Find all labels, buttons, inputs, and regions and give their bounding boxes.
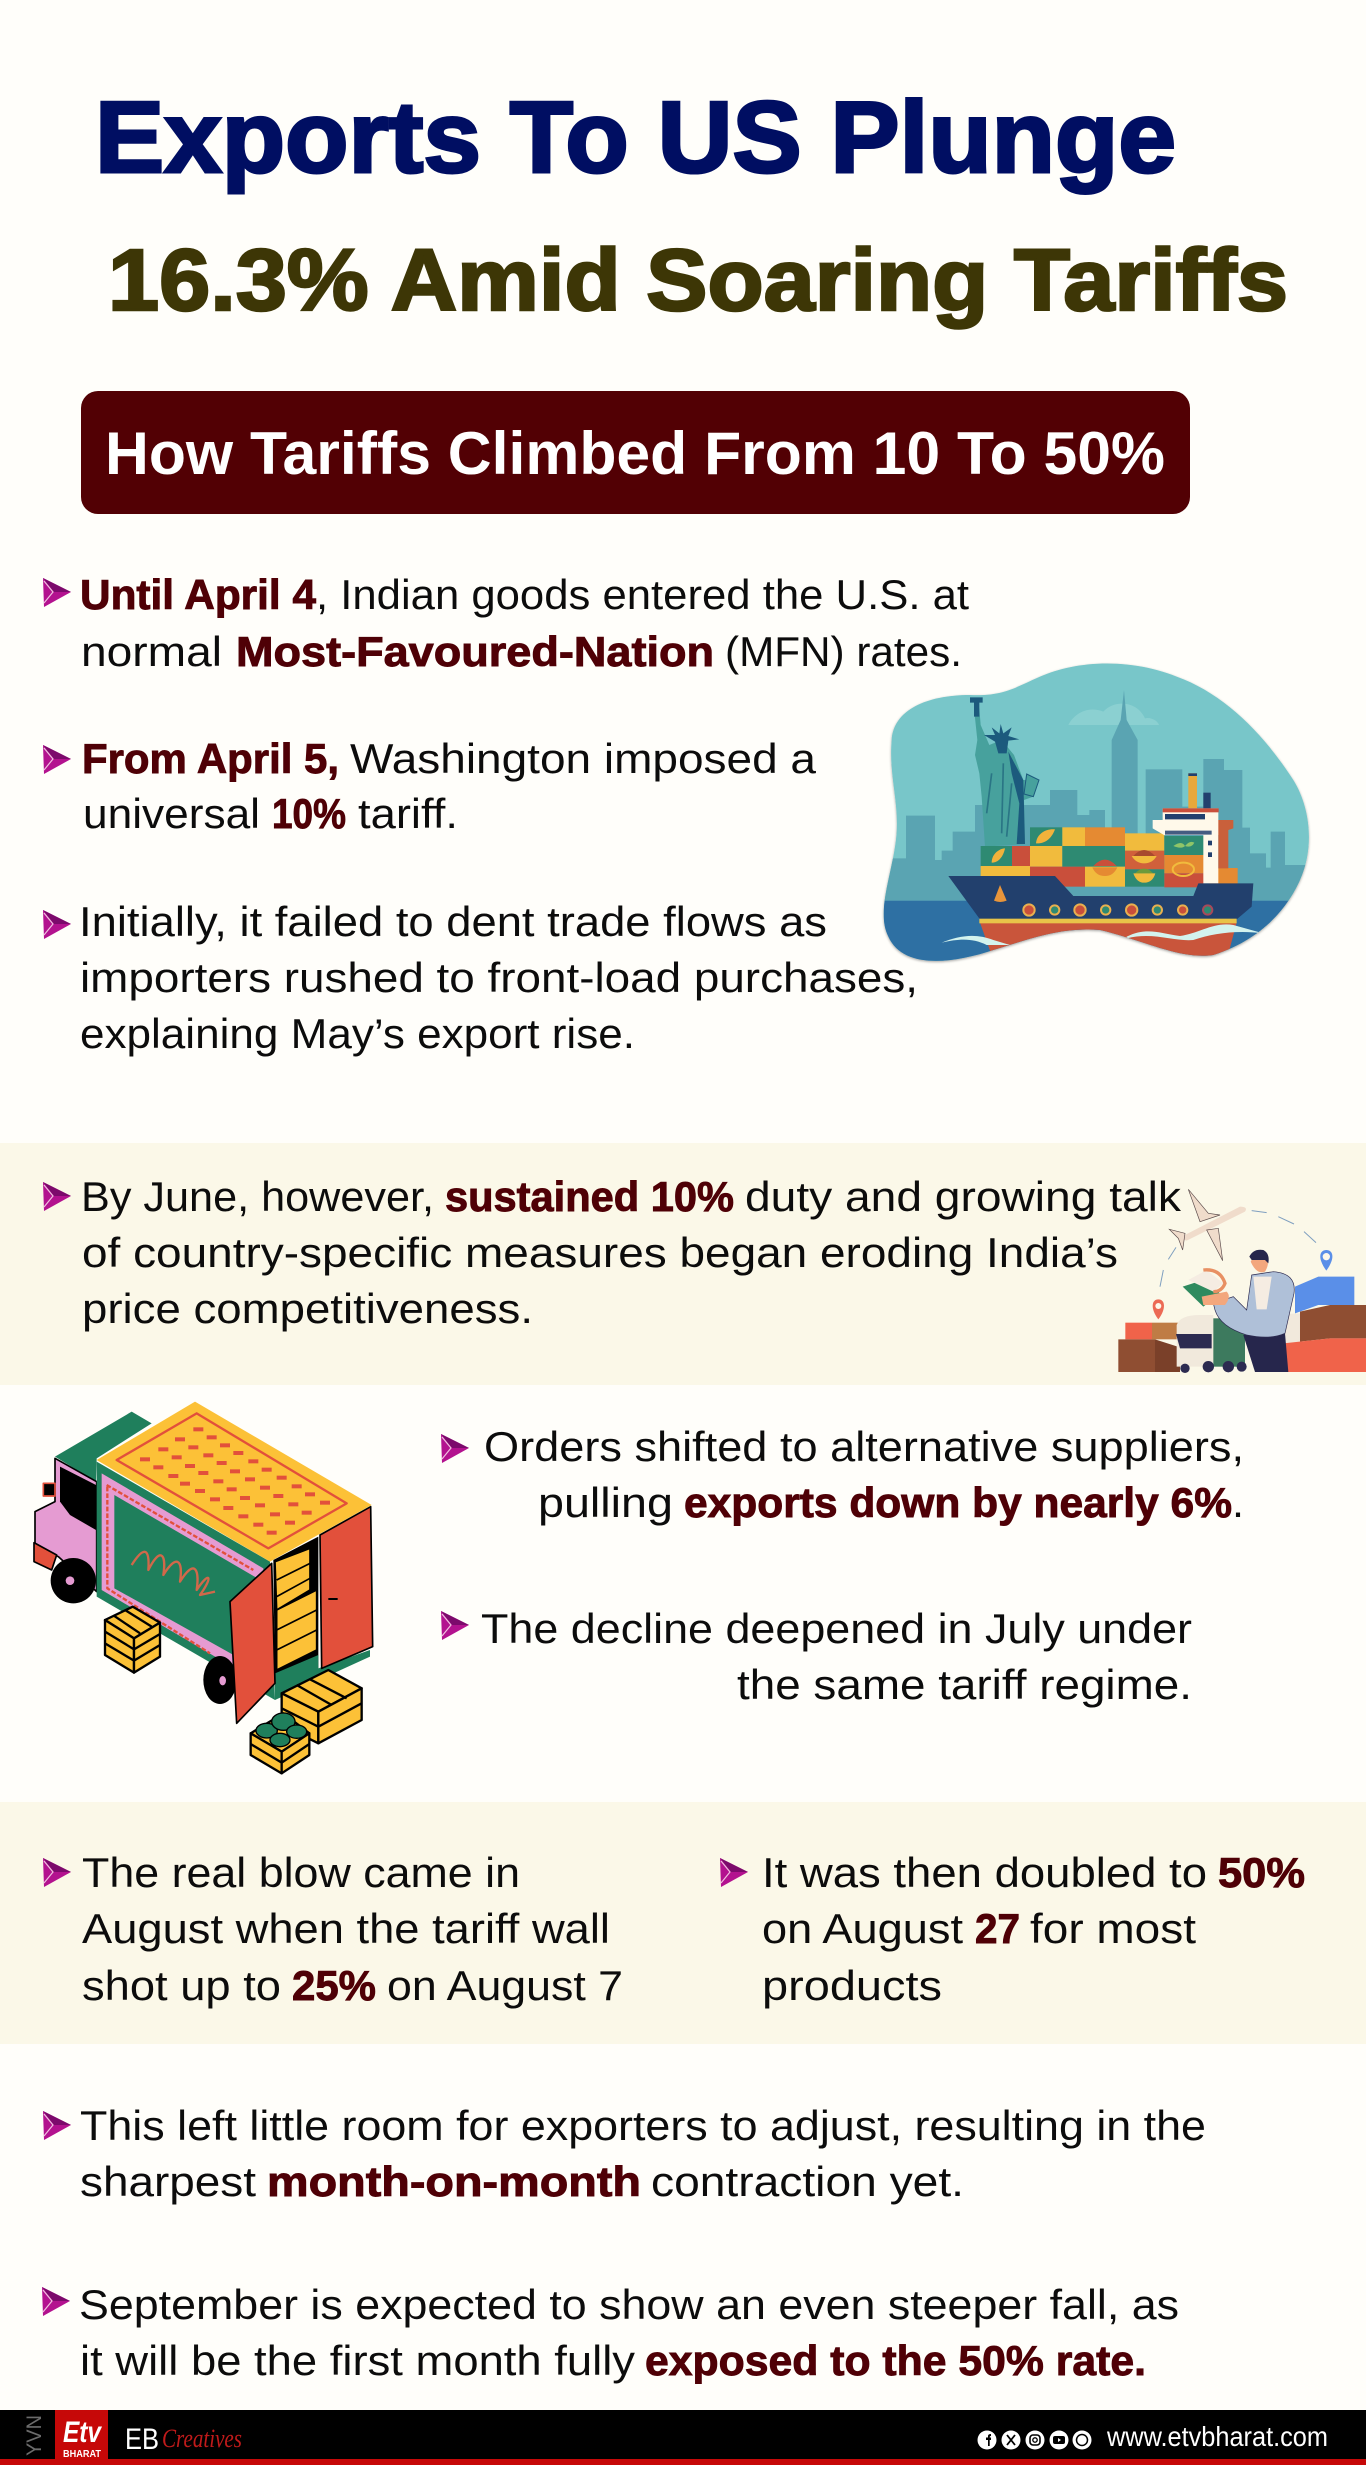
text block: little room	[43, 2102, 1206, 2205]
text block: real blow: The real blow came in	[82, 1849, 520, 1896]
title	[95, 82, 1288, 329]
text block: until april 4: (MFN) rates.	[725, 628, 962, 675]
text block: little room: month-on-month	[267, 2158, 641, 2205]
text block: by june: price competitiveness.	[82, 1285, 533, 1332]
text block: doubled to 50: for most	[1030, 1905, 1196, 1952]
text block: orders shifted	[441, 1423, 1244, 1526]
text block: initially: Initially, it failed to dent trade flows as	[79, 898, 827, 945]
text block: september: exposed to the 50% rate.	[645, 2337, 1146, 2384]
text block: doubled to 50: 27	[975, 1905, 1020, 1952]
text block: from april 5: universal	[83, 790, 260, 837]
text block: by june: duty and growing talk	[745, 1173, 1182, 1220]
text block: little room: contraction yet.	[651, 2158, 964, 2205]
text block: decline deepened: The decline deepened in July under	[481, 1605, 1192, 1652]
text block: by june: sustained 10%	[445, 1173, 734, 1220]
map pins	[1153, 1299, 1164, 1319]
doors	[230, 1563, 275, 1723]
waves	[942, 936, 1010, 945]
text block: by june: of country-specific measures began eroding India’s	[82, 1229, 1118, 1276]
illustration: statue of liberty and cargo ship	[882, 663, 1310, 964]
text block: real blow: 25%	[292, 1962, 376, 2009]
panel: august band	[0, 1802, 1366, 2044]
text block: from april 5: From April 5,	[82, 735, 339, 782]
text block: doubled to 50: It was then doubled to	[762, 1849, 1207, 1896]
text block: until april 4: Until April 4	[80, 571, 317, 618]
logo: etv bharat: BHARAT	[63, 2449, 101, 2460]
text block: until april 4: , Indian goods entered the U.S. at	[316, 571, 969, 618]
byline: YVN	[23, 2415, 46, 2456]
text block: real blow: August when the tariff wall	[82, 1905, 610, 1952]
panel: june band	[0, 1143, 1366, 1385]
text block: orders shifted: .	[1232, 1479, 1244, 1526]
worker	[1243, 1333, 1288, 1372]
text block: orders shifted: exports down by nearly 6%	[684, 1479, 1232, 1526]
statue	[974, 708, 1032, 846]
crates	[105, 1607, 362, 1773]
logo: eb creatives: Creatives	[162, 2424, 242, 2453]
title line 2: 16.3% Amid Soaring Tariffs	[108, 232, 1288, 329]
text block: decline deepened: the same tariff regime.	[737, 1661, 1192, 1708]
text block: september: it will be the first month fully	[80, 2337, 635, 2384]
illustration: logistics worker with containers	[1118, 1189, 1366, 1373]
logo: etv bharat: Etv	[63, 2416, 103, 2449]
hull	[980, 922, 1237, 956]
banner heading: How Tariffs Climbed From 10 To 50%	[105, 420, 1165, 487]
text block: initially: importers rushed to front-load purchases,	[80, 954, 918, 1001]
text block: doubled to 50: 50%	[1218, 1849, 1305, 1896]
cloud	[1068, 704, 1159, 725]
text block: decline deepened	[441, 1605, 1192, 1708]
containers	[1125, 1323, 1152, 1339]
text block: until april 4	[43, 571, 969, 675]
social icons	[978, 2430, 1092, 2450]
footer	[0, 2410, 1366, 2465]
text block: real blow: on August 7	[387, 1962, 623, 2009]
rear wheel	[203, 1656, 237, 1704]
roof	[97, 1402, 372, 1562]
clipboard	[1183, 1280, 1220, 1307]
cargo side	[97, 1462, 275, 1700]
text block: initially	[43, 898, 918, 1057]
text block: real blow	[43, 1849, 623, 2009]
truck	[1177, 1315, 1213, 1367]
water	[884, 900, 1288, 961]
text block: from april 5: Washington imposed a	[350, 735, 817, 782]
text block: real blow: shot up to	[82, 1962, 281, 2009]
superstructure	[1188, 773, 1197, 808]
text block: doubled to 50: products	[762, 1962, 942, 2009]
text block: by june	[43, 1173, 1182, 1332]
plane	[1178, 1207, 1246, 1241]
containers	[981, 846, 1012, 867]
text block: orders shifted: pulling	[538, 1479, 673, 1526]
logo: eb creatives	[125, 2423, 242, 2456]
text block: from april 5	[43, 735, 817, 837]
text block: orders shifted: Orders shifted to alternative suppliers,	[484, 1423, 1244, 1470]
text block: doubled to 50: on August	[762, 1905, 963, 1952]
banner heading	[81, 391, 1190, 514]
logo: etv bharat	[55, 2410, 108, 2460]
illustration: decorated truck with crates	[34, 1402, 373, 1773]
goods	[992, 848, 1005, 863]
truck cab	[55, 1412, 152, 1482]
text block: by june: By June, however,	[81, 1173, 434, 1220]
text block: until april 4: normal	[81, 628, 222, 675]
text block: from april 5: tariff.	[358, 790, 458, 837]
interior and cargo	[273, 1537, 318, 1690]
skyline	[880, 690, 1327, 901]
title line 1: Exports To US Plunge	[95, 82, 1176, 194]
text block: initially: explaining May’s export rise.	[80, 1010, 635, 1057]
text block: until april 4: Most-Favoured-Nation	[236, 628, 714, 675]
text block: from april 5: 10%	[272, 790, 346, 837]
text block: little room: This left little room for exporters to adjust, resulting in the	[80, 2102, 1206, 2149]
text block: doubled to 50	[720, 1849, 1305, 2009]
logo: eb creatives: EB	[125, 2423, 159, 2456]
text block: little room: sharpest	[80, 2158, 256, 2205]
website: www.etvbharat.com	[1106, 2421, 1328, 2452]
text block: september	[42, 2281, 1179, 2384]
text block: september: September is expected to show an even steeper fall, as	[79, 2281, 1179, 2328]
